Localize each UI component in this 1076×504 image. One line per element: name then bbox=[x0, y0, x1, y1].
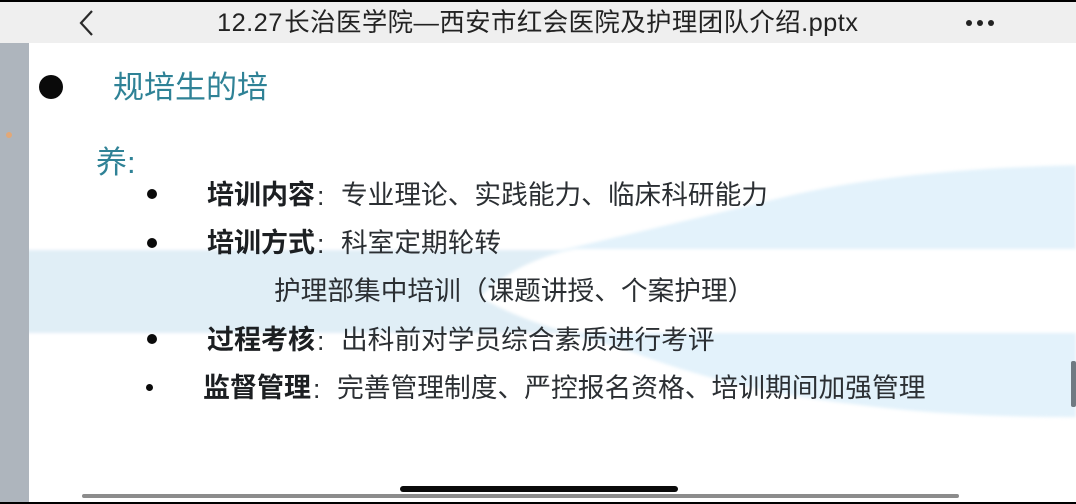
bullet: training method: : bbox=[317, 229, 324, 259]
bottom screen edge bbox=[0, 502, 1076, 504]
bullet: training content: 专业理论、实践能力、临床科研能力 bbox=[341, 180, 768, 210]
home indicator bbox=[400, 486, 678, 492]
bullet: training method: 科室定期轮转 bbox=[341, 228, 501, 258]
bullet: process assessment: : bbox=[317, 326, 324, 356]
large heading bullet bbox=[39, 75, 63, 99]
bullet: supervision management: 完善管理制度、严控报名资格、培训期间加强管理 bbox=[337, 373, 926, 403]
slide heading line one: 规培生的培 bbox=[113, 70, 268, 105]
vertical scrollbar bbox=[1071, 361, 1076, 407]
icon: back chevron bbox=[80, 10, 93, 36]
document file name: 12.27 长治医学院—西安市红会医院及护理团队介绍.pptx bbox=[217, 9, 858, 37]
slide heading line two: 养: bbox=[96, 145, 136, 180]
icon: orange marker bbox=[6, 132, 12, 138]
training method second line: 护理部集中培训（课题讲授、个案护理） bbox=[274, 276, 754, 306]
bullet: training content bbox=[147, 180, 768, 211]
icon: more dots bbox=[966, 20, 994, 26]
bullet: process assessment: 出科前对学员综合素质进行考评 bbox=[341, 325, 715, 355]
left thumbnail sidebar bbox=[0, 43, 29, 504]
top navigation bar bbox=[0, 2, 1076, 43]
horizontal scrollbar bbox=[82, 494, 959, 498]
bullet: training content: 培训内容 bbox=[207, 180, 315, 210]
bullet: process assessment bbox=[147, 325, 715, 356]
bullet: training method bbox=[147, 228, 501, 259]
bullet: process assessment: 过程考核 bbox=[207, 325, 315, 355]
bullet: training content: : bbox=[317, 181, 324, 211]
bullet: supervision management: 监督管理 bbox=[203, 373, 311, 403]
bullet: supervision management: : bbox=[313, 374, 320, 404]
bullet: training method: 培训方式 bbox=[207, 228, 315, 258]
top screen edge bbox=[0, 0, 1076, 2]
